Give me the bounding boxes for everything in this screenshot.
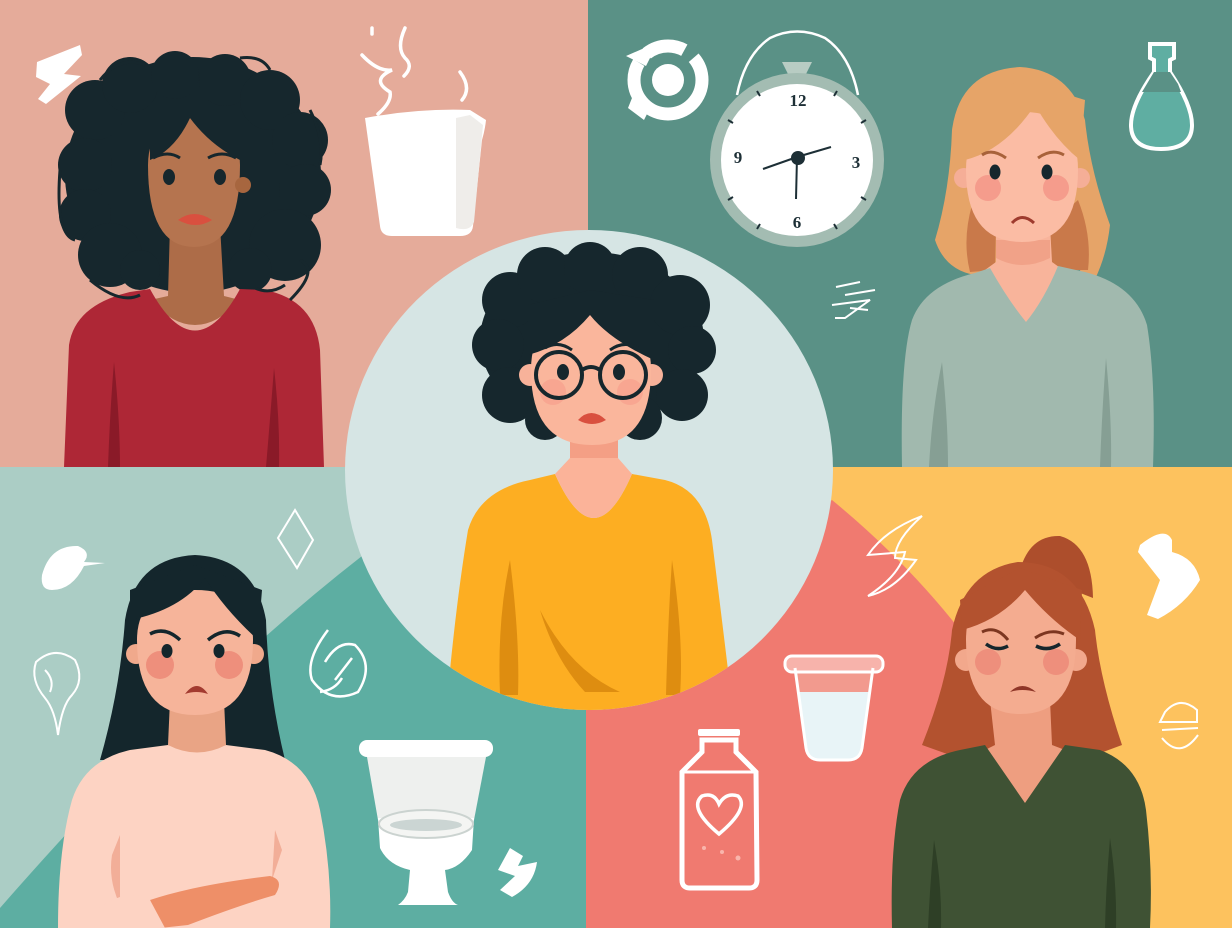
panel: bottom-left teal — [0, 467, 587, 928]
icon: burger scribble — [1160, 703, 1198, 748]
person: top-right woman — [902, 67, 1154, 467]
icon: round scribble — [310, 630, 366, 696]
icon: lightning bottom-left — [498, 848, 537, 897]
icon: lightning outline — [868, 516, 922, 596]
icon: steaming cup — [362, 28, 486, 236]
center circle panel — [345, 230, 833, 710]
icon: alarm clock — [710, 32, 884, 247]
person: top-left woman — [58, 51, 331, 467]
icon: alarm clock: 9 — [734, 148, 742, 167]
icon: diamond — [278, 510, 313, 568]
icon: alarm clock: 6 — [793, 213, 801, 232]
icon: cloud outline — [34, 653, 79, 735]
icon: water glass — [785, 656, 883, 760]
icon: alarm clock: 3 — [852, 153, 860, 172]
icon: flask — [1131, 44, 1192, 149]
icon: alarm clock: 12 — [790, 91, 806, 110]
icon: white blob — [1138, 534, 1200, 619]
icon: circular target top-right — [626, 42, 702, 120]
person: bottom-left woman — [58, 555, 330, 928]
panel: top-right green — [588, 0, 1232, 468]
icon: bottle with heart — [682, 729, 757, 888]
icon: toilet — [359, 740, 493, 905]
person: bottom-right woman — [892, 536, 1151, 928]
panel: bottom-right yellow and coral — [586, 467, 1232, 928]
panel: top-left pink — [0, 0, 589, 468]
icon: kidney shape — [42, 546, 105, 590]
person: center woman with glasses — [450, 242, 728, 720]
icon: scribble — [832, 282, 875, 318]
icon: lightning top-left — [36, 45, 82, 104]
